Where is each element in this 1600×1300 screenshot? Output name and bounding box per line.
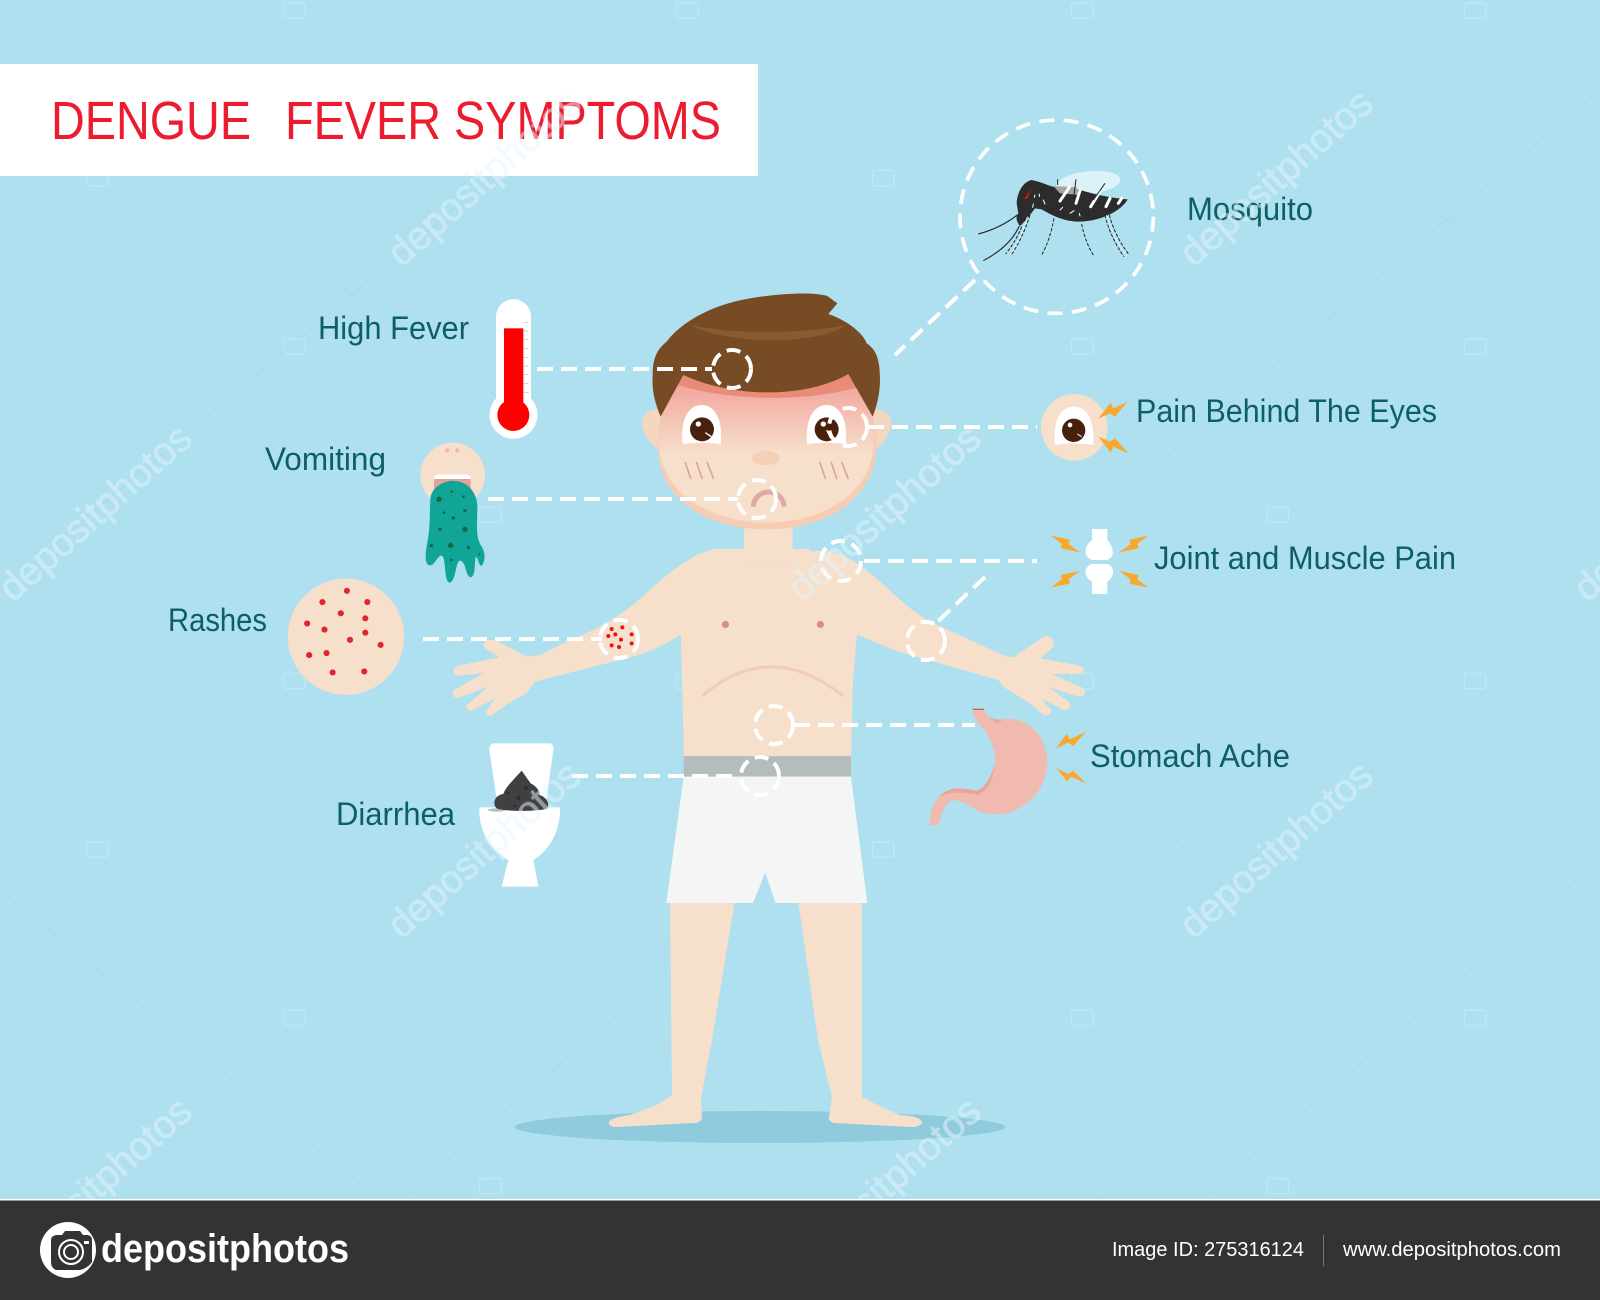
chest details — [702, 621, 843, 696]
ears — [642, 409, 663, 452]
label: Vomiting: Vomiting — [265, 441, 386, 477]
mouth — [753, 492, 784, 507]
right arm and hand — [800, 551, 1085, 715]
rash patch on arm — [606, 625, 634, 649]
watermarks: depositphotos — [779, 1089, 989, 1283]
footer logo: camera — [40, 1222, 96, 1278]
shorts — [666, 756, 867, 903]
footer logo: wordmark: depositphotos — [101, 1227, 349, 1271]
label: Rashes: Rashes — [168, 602, 267, 638]
icon: thermometer — [489, 299, 537, 439]
figure: boy body — [452, 549, 1085, 1127]
icon: stomach with pain bolts — [929, 709, 1086, 825]
torso — [680, 549, 860, 760]
footer bar — [0, 1199, 1600, 1300]
label: Diarrhea: Diarrhea — [336, 796, 455, 832]
icon: joint with pain bolts — [1051, 529, 1149, 594]
ground shadow — [515, 1111, 1005, 1143]
label: High Fever: High Fever — [318, 310, 469, 346]
footer: image id: Image ID: 275316124 — [1112, 1239, 1304, 1261]
icon: painful eye — [1041, 394, 1128, 461]
watermarks: depositphotos — [1171, 753, 1381, 947]
label: Stomach Ache: Stomach Ache — [1090, 738, 1290, 774]
cheek marks — [685, 463, 848, 478]
face — [658, 374, 876, 529]
neck — [744, 520, 793, 563]
nose — [752, 451, 780, 465]
watermarks: depositphotos — [1171, 81, 1381, 275]
eyes — [682, 405, 846, 444]
label: Joint and Muscle Pain: Joint and Muscle Pain — [1154, 540, 1456, 576]
title banner: FEVER SYMPTOMS — [285, 91, 721, 151]
dashed body markers — [600, 350, 945, 795]
dashed connectors — [423, 280, 1037, 776]
icon: vomiting face — [420, 443, 485, 583]
watermarks: depositphotos — [379, 753, 589, 947]
icon: rash circle — [288, 579, 404, 695]
icon: toilet with stool — [479, 743, 560, 887]
footer: website: www.depositphotos.com — [1342, 1239, 1561, 1261]
watermarks: depositphotos — [379, 81, 589, 275]
figure: head — [642, 294, 891, 563]
watermarks: depositphotos — [779, 416, 989, 610]
title banner: DENGUE — [51, 91, 251, 151]
hair — [652, 294, 880, 417]
hairline — [677, 373, 857, 398]
left arm and hand — [452, 549, 720, 716]
title banner — [0, 64, 758, 176]
label: Pain Behind The Eyes: Pain Behind The Eyes — [1136, 393, 1437, 429]
label: Mosquito: Mosquito — [1187, 191, 1313, 227]
icon: mosquito in dashed circle — [960, 120, 1153, 313]
legs — [609, 900, 922, 1127]
